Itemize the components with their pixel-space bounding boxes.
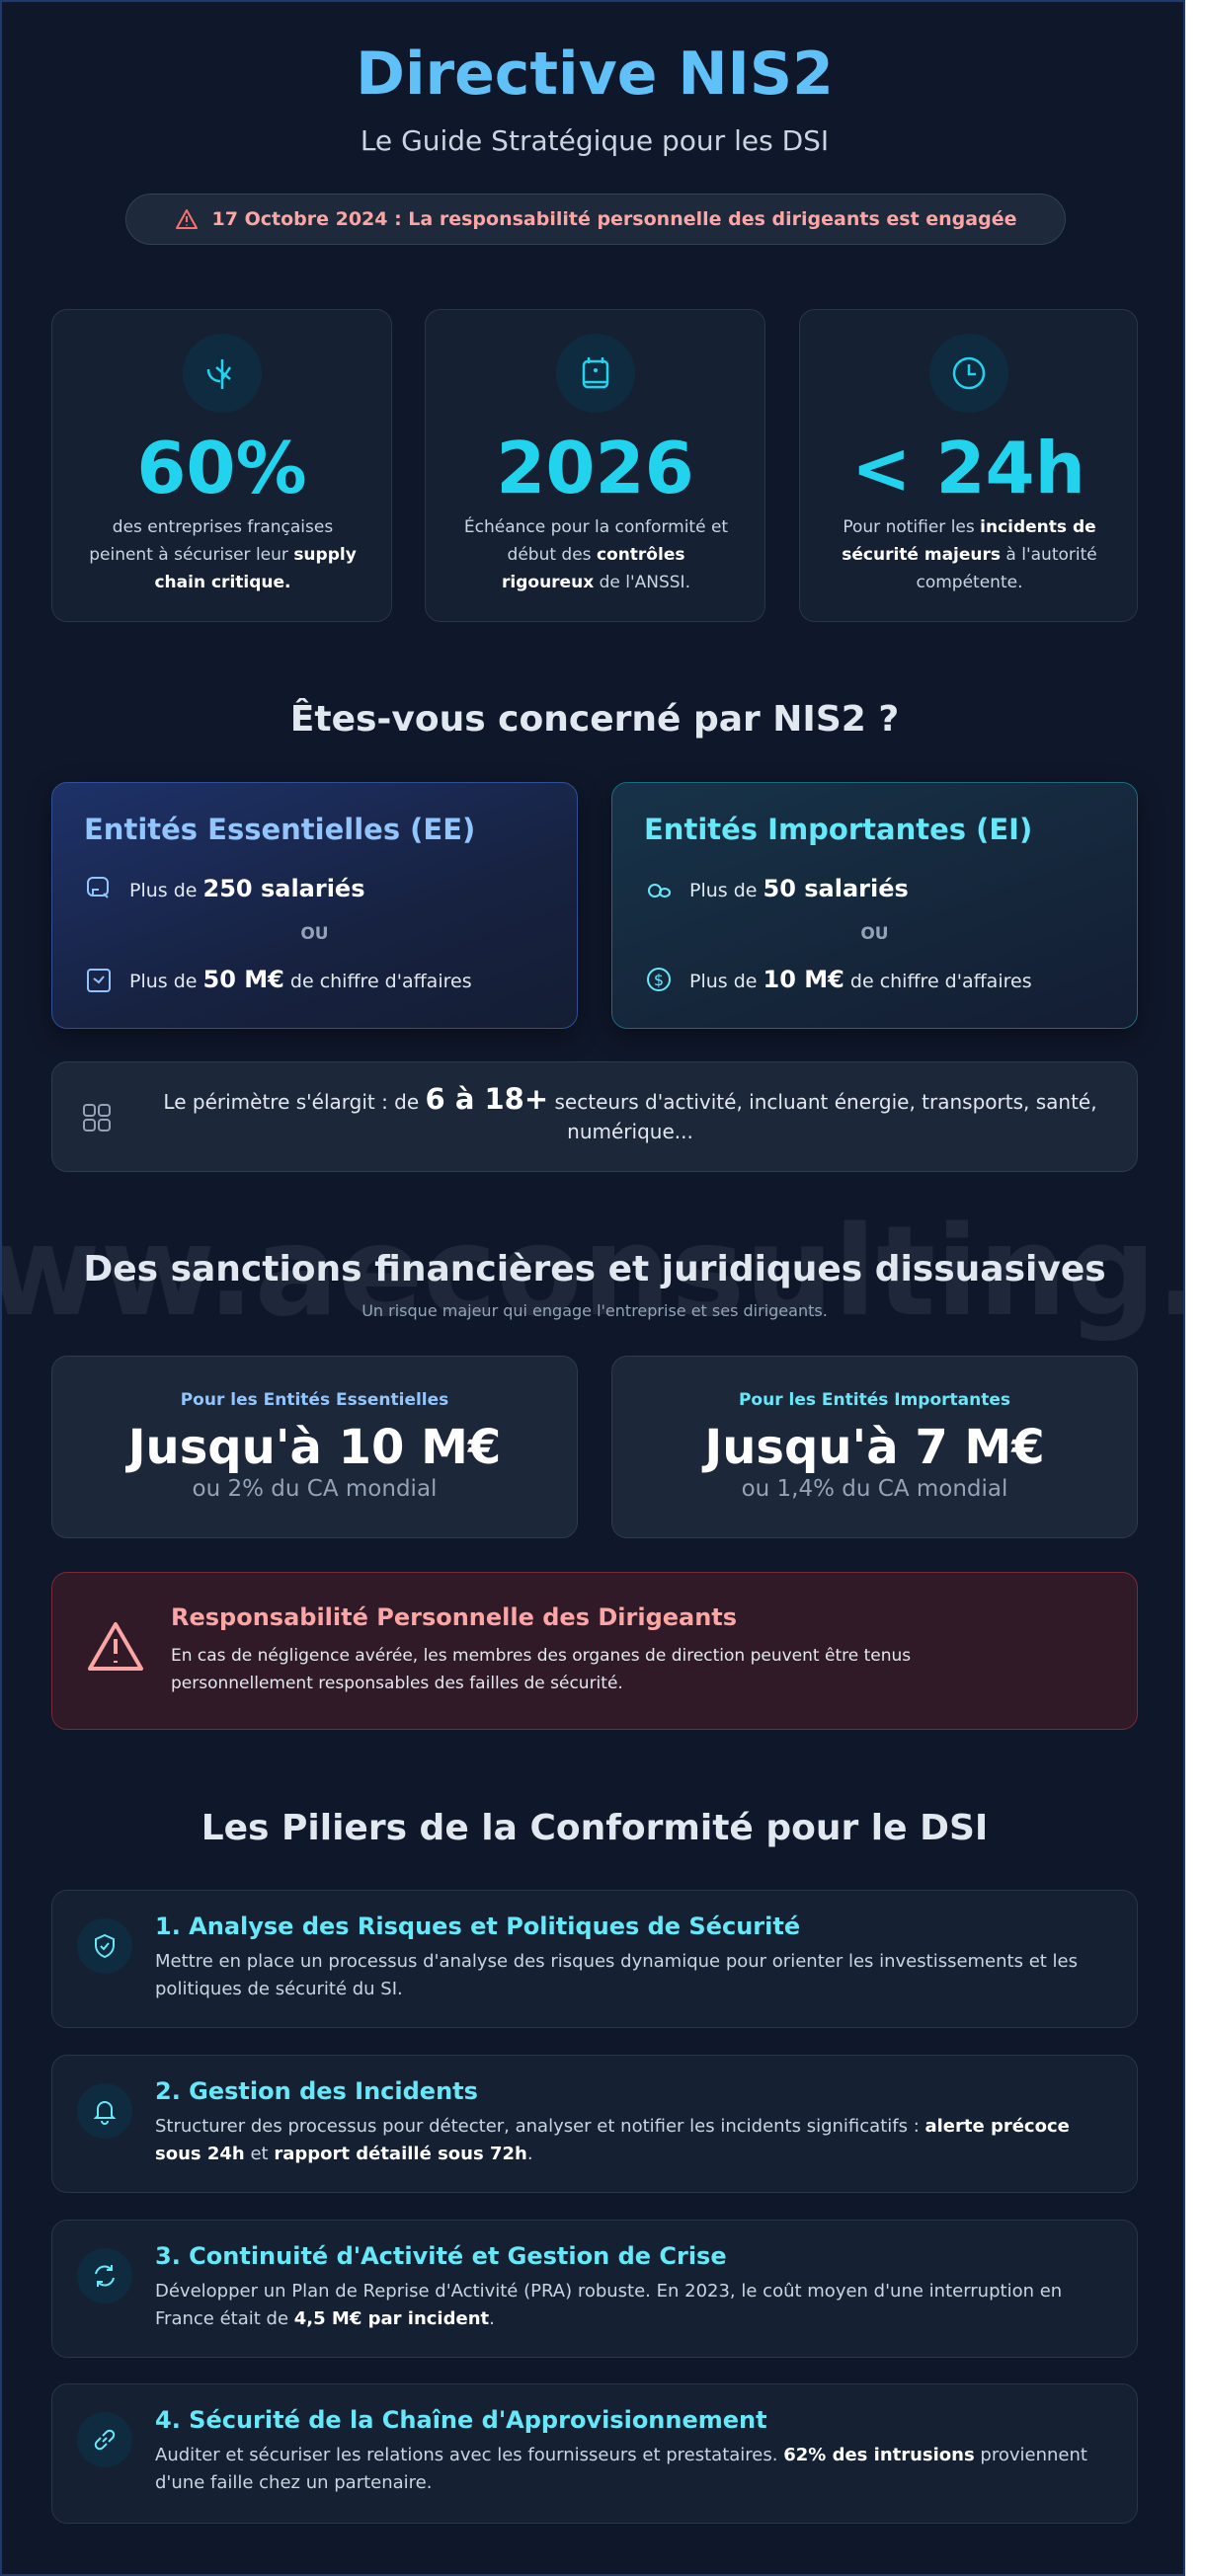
penalty card: EE: ou 2% du CA mondial bbox=[193, 1476, 437, 1502]
callout: personal liability: Responsabilité Personnelle des Dirigeants bbox=[171, 1603, 737, 1631]
title: Directive NIS2 bbox=[356, 39, 834, 109]
stat card: 60%: des entreprises françaises peinent à sécuriser leur supply chain critique. bbox=[89, 517, 357, 592]
subtitle: Le Guide Stratégique pour les DSI bbox=[361, 124, 829, 157]
panel: EE: OU bbox=[300, 924, 329, 944]
icon: warning bbox=[88, 1621, 144, 1671]
heading: piliers: Les Piliers de la Conformité pour le DSI bbox=[201, 1808, 988, 1848]
pillar 4: Auditer et sécuriser les relations avec les fournisseurs et prestataires. 62% des intrusions proviennent d'une faille chez un partenaire. bbox=[155, 2445, 1087, 2493]
stat card: 60% bbox=[51, 309, 392, 622]
callout: personal liability: En cas de négligence avérée, les membres des organes de direction peuvent être tenus personnellement responsables des failles de sécurité. bbox=[171, 1646, 911, 1693]
heading: sanctions: Des sanctions financières et juridiques dissuasives bbox=[83, 1249, 1106, 1289]
panel: EI: OU bbox=[860, 924, 889, 944]
icon: refresh bbox=[77, 2248, 132, 2303]
penalty card: EI: ou 1,4% du CA mondial bbox=[742, 1476, 1007, 1502]
subheading: Un risque majeur qui engage l'entreprise et ses dirigeants. bbox=[362, 1301, 828, 1320]
icon: shield bbox=[77, 1918, 132, 1974]
icon: calendar bbox=[556, 334, 635, 413]
penalty card: EE bbox=[51, 1356, 578, 1538]
pillar 3: 3. Continuité d'Activité et Gestion de Crise bbox=[155, 2242, 727, 2270]
pillar 2: Structurer des processus pour détecter, analyser et notifier les incidents significatifs : alerte précoce sous 24h et rapport détaillé sous 72h. bbox=[155, 2116, 1070, 2164]
penalty card: EE: Pour les Entités Essentielles bbox=[181, 1390, 448, 1410]
sectors bar bbox=[51, 1061, 1138, 1172]
icon: bell bbox=[77, 2083, 132, 2139]
EE row employees: Plus de 250 salariés bbox=[129, 875, 365, 902]
icon: supply bbox=[183, 334, 262, 413]
EI heading: Entités Importantes (EI) bbox=[644, 813, 1032, 846]
stat card: 2026 bbox=[425, 309, 765, 622]
heading: concerné: Êtes-vous concerné par NIS2 ? bbox=[290, 699, 899, 740]
pillar 4: 4. Sécurité de la Chaîne d'Approvisionnement bbox=[155, 2406, 767, 2434]
stat card: 24h: Pour notifier les incidents de sécurité majeurs à l'autorité compétente. bbox=[842, 517, 1097, 592]
pillar 3: Développer un Plan de Reprise d'Activité (PRA) robuste. En 2023, le coût moyen d'une interruption en France était de 4,5 M€ par incident. bbox=[155, 2281, 1062, 2329]
stat card: 24h: < 24h bbox=[851, 427, 1085, 509]
pillar 3 bbox=[51, 2220, 1138, 2358]
pillar 1 bbox=[51, 1890, 1138, 2028]
stat card: 2026: 2026 bbox=[496, 427, 694, 509]
callout: personal liability bbox=[51, 1572, 1138, 1730]
stat card: 2026: Échéance pour la conformité et début des contrôles rigoureux de l'ANSSI. bbox=[464, 517, 728, 592]
panel: EE bbox=[51, 782, 578, 1029]
stat card: 24h bbox=[799, 309, 1138, 622]
EI row revenue: Plus de 10 M€ de chiffre d'affaires bbox=[689, 966, 1032, 993]
EE heading: Entités Essentielles (EE) bbox=[84, 813, 475, 846]
EI row employees: Plus de 50 salariés bbox=[689, 875, 909, 902]
penalty card: EI bbox=[611, 1356, 1138, 1538]
pillar 4 bbox=[51, 2383, 1138, 2524]
icon: clock bbox=[929, 334, 1008, 413]
sectors bar: Le périmètre s'élargit : de 6 à 18+ secteurs d'activité, incluant énergie, transports, santé, numérique... bbox=[163, 1082, 1097, 1143]
penalty card: EI: Pour les Entités Importantes bbox=[739, 1390, 1010, 1410]
alert pill bbox=[125, 194, 1066, 245]
stat card: 60%: 60% bbox=[136, 427, 307, 509]
penalty card: EI: Jusqu'à 7 M€ bbox=[704, 1420, 1045, 1475]
icon: grid bbox=[83, 1104, 111, 1132]
penalty card: EE: Jusqu'à 10 M€ bbox=[128, 1420, 501, 1475]
EI row revenue: $ bbox=[654, 971, 664, 989]
panel: EI bbox=[611, 782, 1138, 1029]
icon: warning bbox=[176, 209, 198, 229]
icon: link bbox=[77, 2412, 132, 2467]
pillar 1: Mettre en place un processus d'analyse des risques dynamique pour orienter les investissements et les politiques de sécurité du SI. bbox=[155, 1951, 1078, 1999]
EE row revenue: Plus de 50 M€ de chiffre d'affaires bbox=[129, 966, 472, 993]
alert pill: 17 Octobre 2024 : La responsabilité personnelle des dirigeants est engagée bbox=[212, 208, 1016, 230]
pillar 1: 1. Analyse des Risques et Politiques de Sécurité bbox=[155, 1912, 800, 1940]
pillar 2 bbox=[51, 2055, 1138, 2193]
pillar 2: 2. Gestion des Incidents bbox=[155, 2077, 478, 2105]
